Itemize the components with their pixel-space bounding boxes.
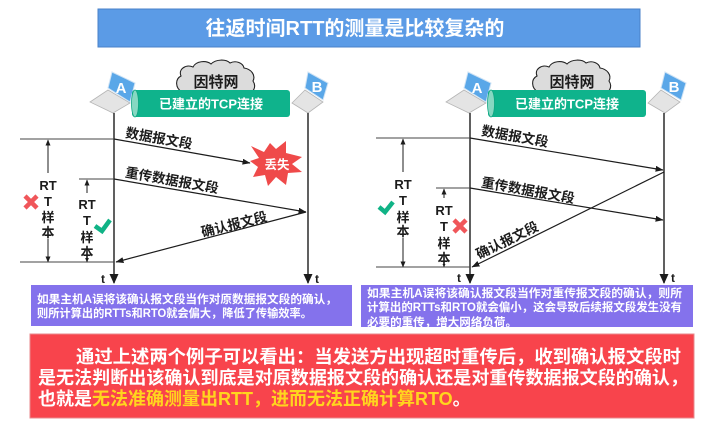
- icon: laptop B: [648, 72, 686, 113]
- RTT sample bracket, inner: RT: [435, 203, 453, 218]
- arrow: data segment: 数据报文段: [124, 124, 194, 152]
- RTT sample bracket, inner: 本: [80, 245, 94, 260]
- arrow: retransmitted segment: [470, 174, 663, 220]
- arrow: ack segment: 确认报文段: [473, 218, 541, 262]
- time labels: t: [101, 272, 105, 286]
- icon: lost burst: 丢失: [264, 157, 290, 172]
- time labels: t: [457, 271, 461, 285]
- icon: laptop A: A: [472, 80, 483, 97]
- callout: conclusion: [30, 334, 694, 418]
- callout: left explanation: 如果主机A误将该确认报文段当作对原数据报文段的确认，: [37, 292, 337, 306]
- callout: left explanation: [31, 285, 352, 326]
- callout: left explanation: 则所计算出的RTTs和RTO就会偏大，降低了传输效率。: [37, 306, 312, 320]
- icon: laptop B: B: [669, 79, 680, 96]
- arrow: retransmitted segment: 重传数据报文段: [124, 164, 220, 196]
- RTT sample bracket, outer: RT: [394, 177, 412, 192]
- icon: laptop A: [90, 72, 135, 113]
- RTT sample bracket, outer: 样: [396, 210, 410, 225]
- host A timeline: [469, 113, 471, 283]
- host A timeline: [113, 113, 115, 283]
- arrow: ack segment: [472, 172, 664, 267]
- time labels: [101, 272, 319, 286]
- icon: wrong mark: [25, 196, 37, 208]
- TCP connection pipe: [132, 90, 290, 117]
- arrow: ack segment: 确认报文段: [199, 208, 269, 240]
- RTT sample bracket, outer: T: [399, 193, 407, 208]
- icon: correct mark: [95, 220, 110, 231]
- arrow: data segment: 数据报文段: [480, 122, 550, 150]
- TCP connection pipe: 已建立的TCP连接: [159, 96, 263, 112]
- RTT sample bracket, outer: 本: [41, 225, 55, 240]
- arrow: ack segment: [116, 208, 306, 262]
- callout: conclusion: 通过上述两个例子可以看出：当发送方出现超时重传后，收到确认报文段时: [76, 346, 681, 367]
- RTT sample bracket, inner: T: [83, 213, 91, 228]
- TCP connection pipe: 已建立的TCP连接: [515, 96, 619, 112]
- host B timeline: [663, 113, 665, 283]
- arrow: data segment: [114, 124, 250, 163]
- time labels: t: [671, 271, 675, 285]
- icon: cloud internet: 因特网: [193, 73, 239, 91]
- RTT sample bracket, outer: [391, 139, 415, 267]
- icon: laptop A: A: [116, 80, 127, 97]
- icon: cloud internet: 因特网: [549, 73, 595, 91]
- icon: cloud internet: [533, 60, 611, 96]
- icon: wrong mark: [454, 220, 466, 232]
- RTT sample bracket, inner: 样: [80, 230, 94, 245]
- time labels: [457, 271, 675, 285]
- RTT sample bracket, outer: 本: [396, 224, 410, 239]
- arrow: retransmitted segment: 重传数据报文段: [480, 174, 576, 206]
- RTT sample bracket, outer: RT: [39, 178, 57, 193]
- RTT sample bracket, outer: T: [44, 194, 52, 209]
- icon: lost burst: [250, 141, 302, 186]
- callout: right explanation: 计算出的RTTs和RTO就会偏小，这会导致后续报文段发生没有: [367, 300, 682, 314]
- icon: laptop A: [446, 72, 491, 113]
- title: 往返时间RTT的测量是比较复杂的: [206, 16, 504, 40]
- title: [98, 9, 640, 47]
- callout: conclusion: 是无法判断出该确认到底是对原数据报文段的确认还是对重传数据报文段的确认，: [38, 367, 688, 388]
- callout: right explanation: [361, 285, 693, 329]
- arrow: retransmitted segment: [114, 164, 306, 212]
- callout: right explanation: 如果主机A误将该确认报文段当作对重传报文段的确认，则所: [367, 286, 683, 300]
- icon: correct mark: [379, 202, 393, 212]
- RTT sample bracket, inner: 样: [437, 236, 451, 251]
- icon: laptop B: B: [312, 79, 323, 96]
- RTT sample bracket, inner: T: [440, 219, 448, 234]
- time labels: t: [315, 272, 319, 286]
- panel: right diagram: [376, 60, 686, 285]
- RTT sample bracket, inner: [76, 180, 98, 262]
- TCP connection pipe: [488, 90, 646, 117]
- RTT sample bracket, inner: 本: [437, 251, 451, 266]
- callout: conclusion: 也就是无法准确测量出RTT，进而无法正确计算RTO。: [38, 388, 471, 409]
- callout: right explanation: 必要的重传，增大网络负荷。: [367, 315, 517, 329]
- host B timeline: [307, 113, 309, 283]
- icon: cloud internet: [177, 60, 255, 96]
- RTT sample bracket, inner: [433, 189, 455, 267]
- icon: laptop B: [292, 72, 328, 113]
- RTT sample bracket, outer: [36, 140, 60, 262]
- panel: left diagram: [20, 60, 328, 286]
- arrow: data segment: [470, 122, 663, 170]
- RTT sample bracket, outer: 样: [41, 210, 55, 225]
- RTT sample bracket, inner: RT: [78, 197, 96, 212]
